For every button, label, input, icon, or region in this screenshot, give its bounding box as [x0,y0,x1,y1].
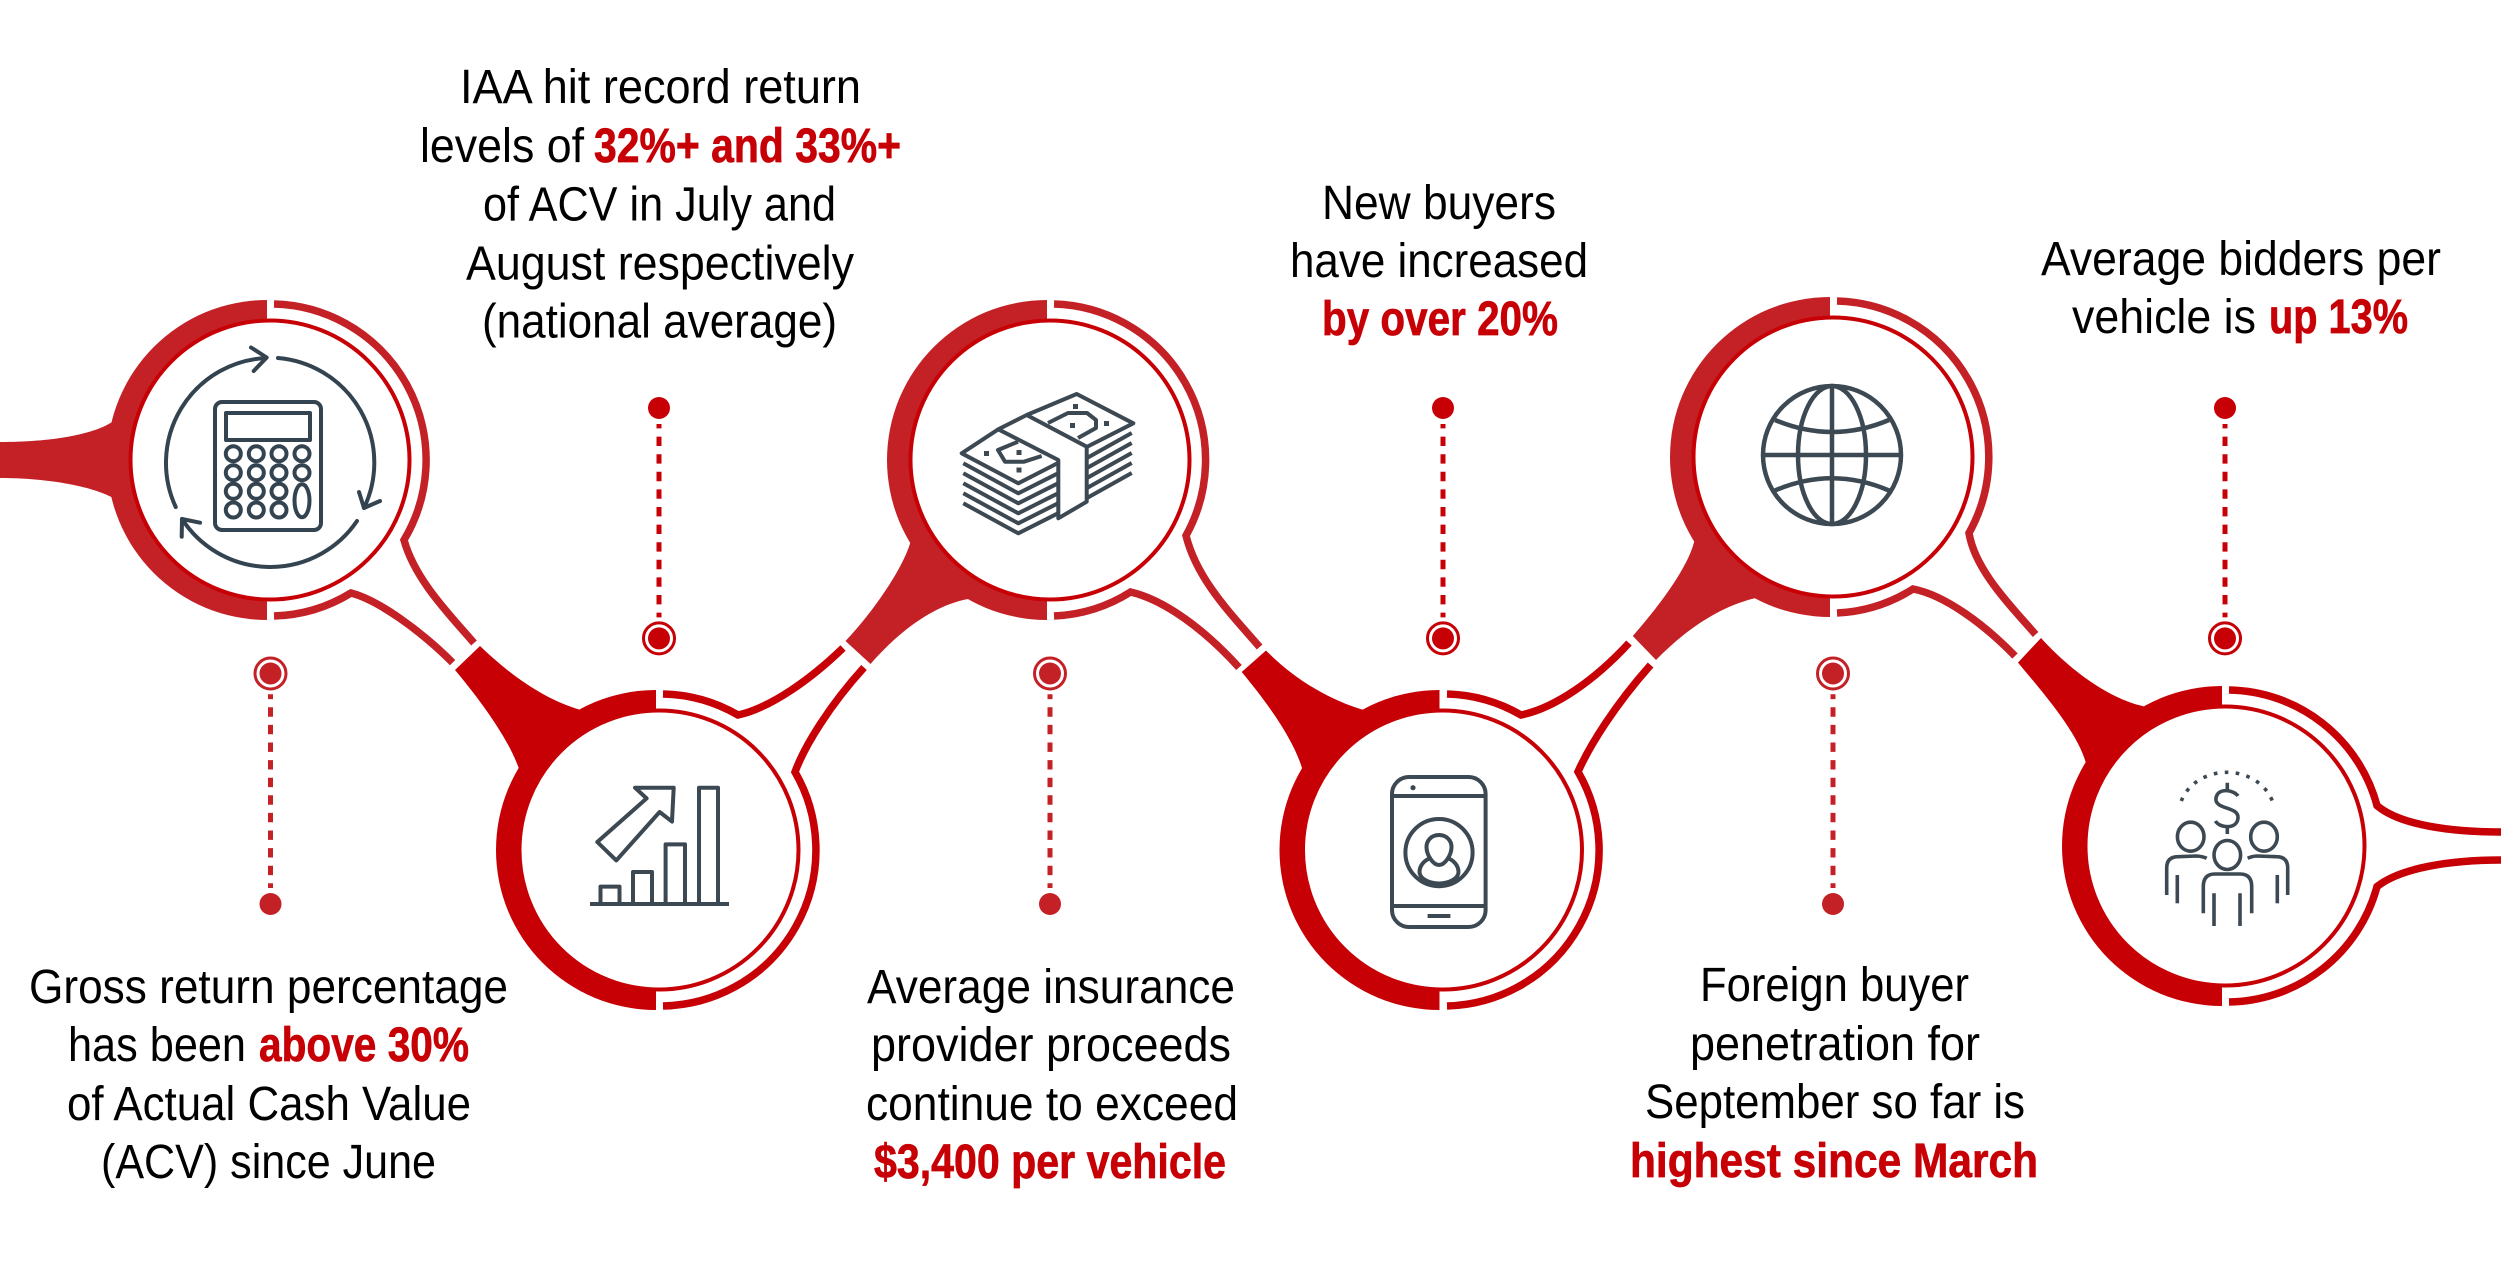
icon: calculator with cycle arrows [166,348,380,567]
text block 4: new buyers [1290,177,1588,346]
node 4: smartphone circle [1242,643,1651,1010]
callout line 1 [255,658,286,915]
text block 2: record return levels: IAA hit record return [460,61,861,114]
text block 1: gross return percentage: has been [68,1019,246,1072]
text block 6: average bidders [2041,233,2441,344]
icon: banded money stack [962,394,1133,533]
callout line 4 [1428,397,1458,654]
text block 1: gross return percentage: (ACV) since June [101,1136,436,1189]
text block 3: insurance provider proceeds: continue to exceed [866,1078,1238,1131]
text block 1: gross return percentage: above 30% [259,1019,469,1072]
text block 6: average bidders: up 13% [2269,291,2408,344]
text block 2: record return levels: levels of [420,120,585,173]
text block 5: foreign buyer penetration: penetration for [1690,1018,1980,1071]
text block 5: foreign buyer penetration: highest since March [1630,1135,2038,1188]
icon: bar chart with arrow [590,788,729,904]
text block 4: new buyers: have increased [1290,235,1588,288]
text block 1: gross return percentage: Gross return percentage [29,961,508,1014]
node 6: bidders circle with right tail [2018,638,2501,1006]
text block 2: record return levels: August respectively [466,238,854,290]
text block 5: foreign buyer penetration: Foreign buyer [1700,959,1969,1012]
text block 2: record return levels: of ACV in July and [483,178,836,232]
node 3: stack of money circle [846,300,1260,668]
text block 3: insurance provider proceeds: $3,400 per vehicle [874,1136,1226,1189]
node 2: rising chart circle [455,646,864,1010]
text block 1: gross return percentage: of Actual Cash Value [67,1078,471,1131]
text block 2: record return levels: 32%+ and 33%+ [594,120,901,173]
callout line 5 [1818,658,1848,915]
callout line 3 [1034,658,1066,915]
text block 5: foreign buyer penetration: September so far is [1645,1076,2025,1129]
text block 5: foreign buyer penetration [1630,959,2038,1188]
callout line 6 [2210,397,2240,654]
node 5: globe circle [1633,297,2036,660]
node 1: calculator circle with left tail [0,300,474,663]
text block 2: record return levels [420,61,901,348]
text block 2: record return levels: (national average) [482,296,837,348]
text block 3: insurance provider proceeds [866,961,1238,1189]
text block 6: average bidders: Average bidders per [2041,233,2441,286]
text block 3: insurance provider proceeds: Average insurance [867,961,1235,1014]
text block 3: insurance provider proceeds: provider proceeds [871,1019,1231,1072]
text block 1: gross return percentage [29,961,508,1189]
text block 6: average bidders: vehicle is [2072,291,2256,344]
icon: people bidding with dollar sign [2167,772,2288,926]
icon: globe [1763,386,1901,524]
text block 4: new buyers: New buyers [1322,177,1556,230]
icon: smartphone with user profile [1392,777,1486,927]
callout line 2 [644,397,674,654]
text block 4: new buyers: by over 20% [1322,293,1558,346]
